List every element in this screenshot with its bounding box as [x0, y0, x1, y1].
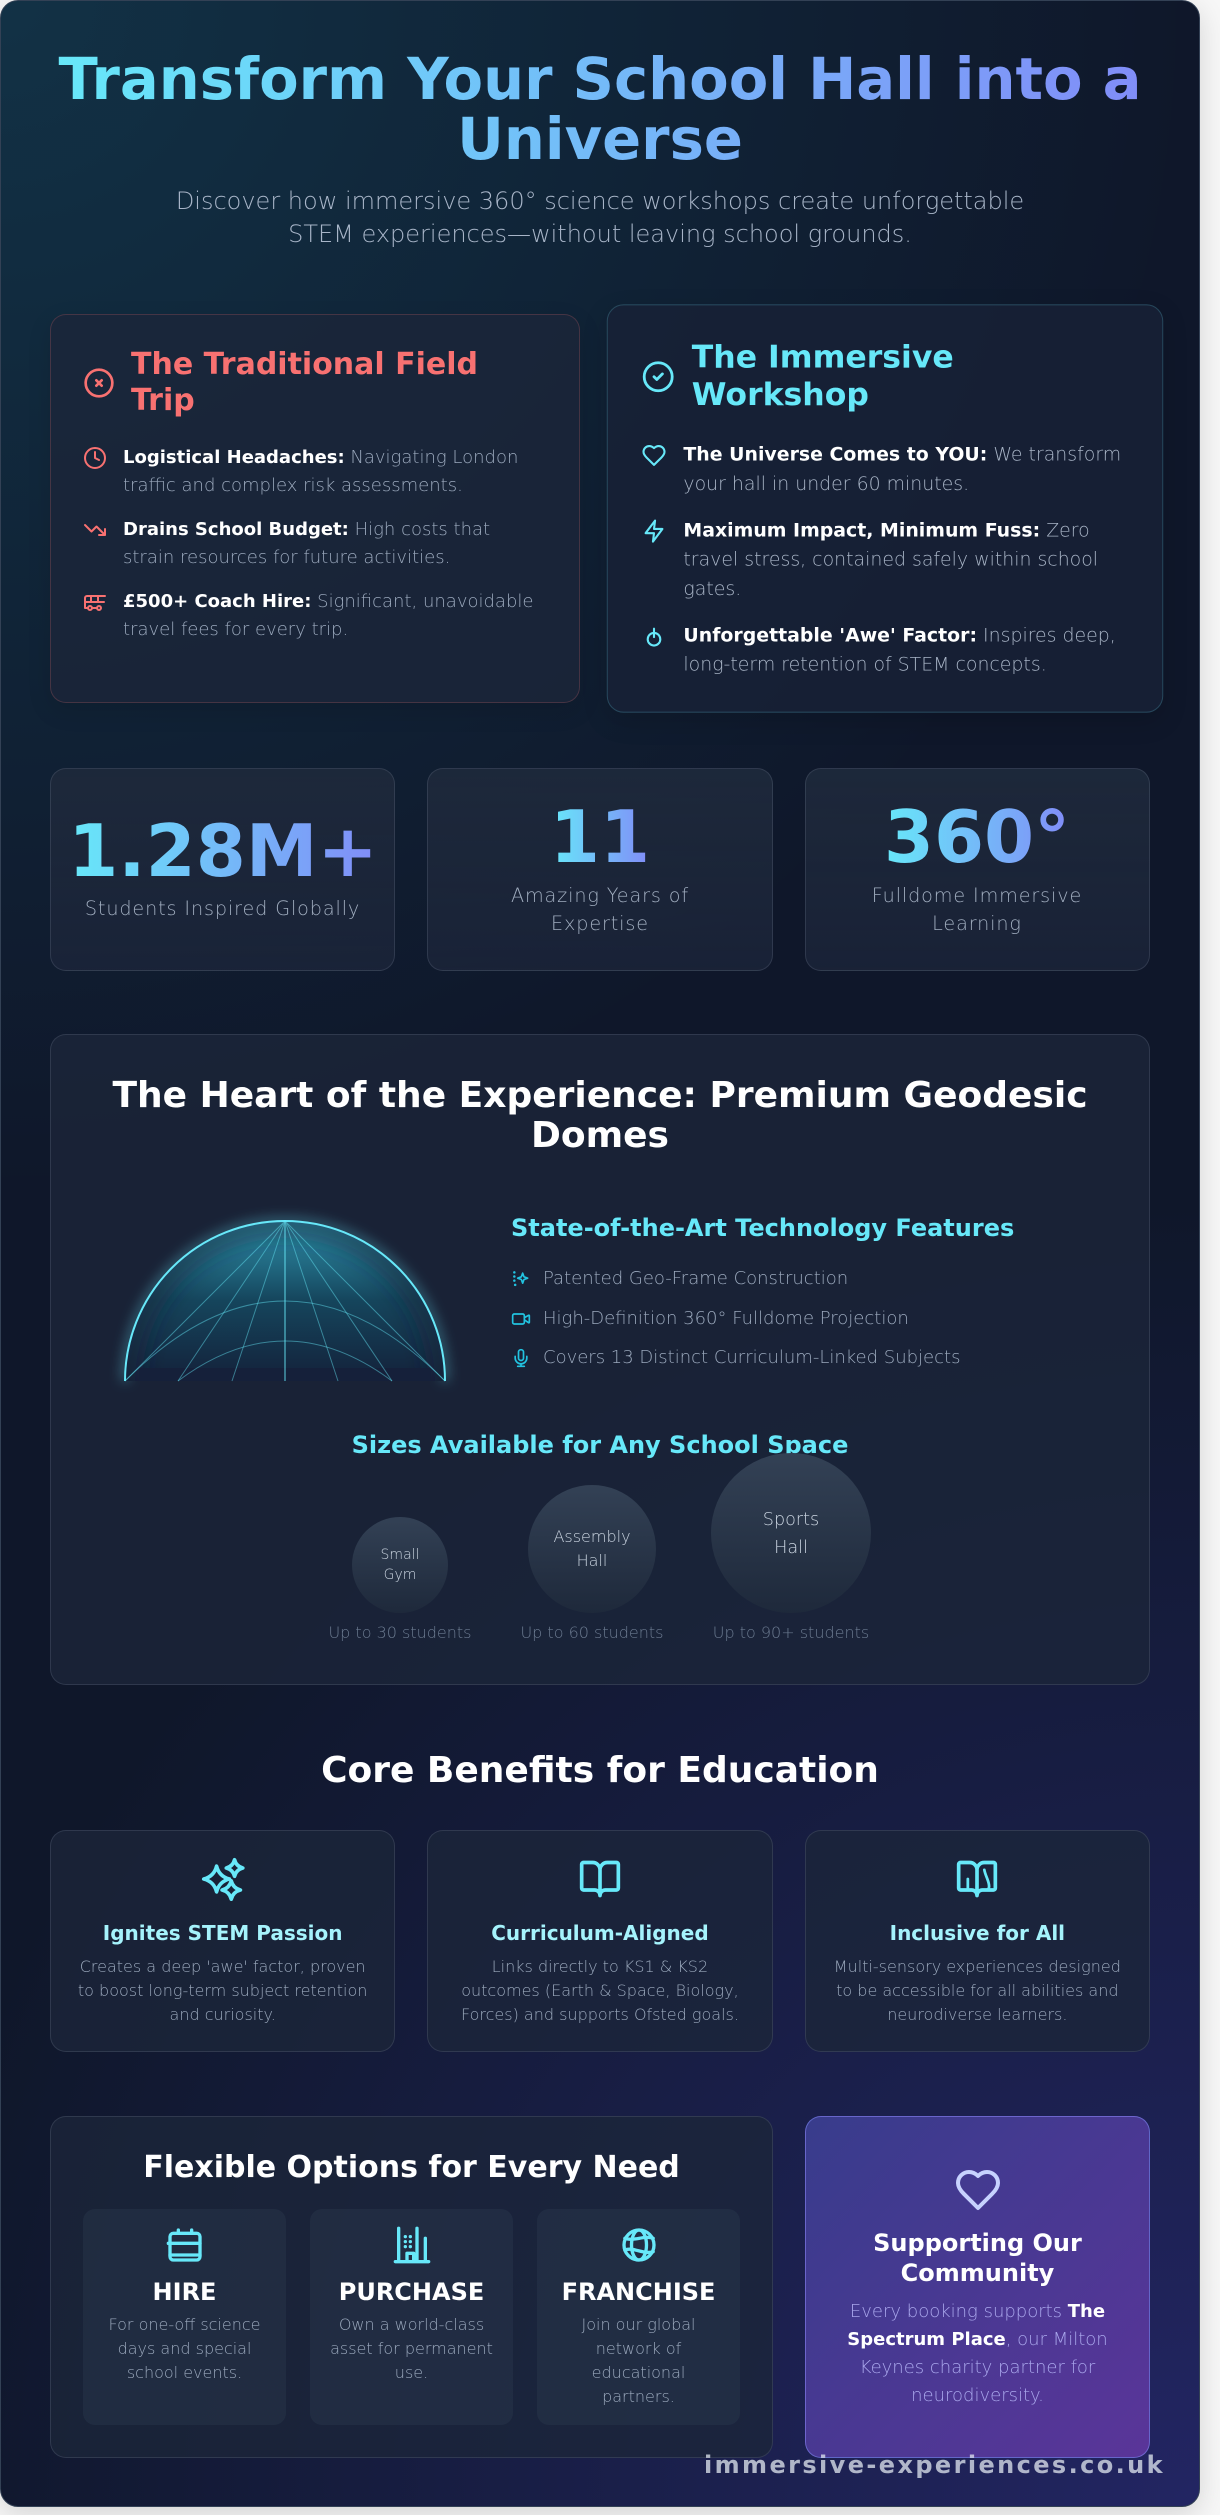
item: logistical headaches: Logistical Headaches: Navigating London traffic and complex risk assessments.	[123, 446, 518, 496]
size: sports hall: Hall	[774, 1538, 808, 1558]
heading: traditional field trip: The Traditional Field	[131, 347, 478, 382]
feature: projection: High-Definition 360° Fulldome Projection	[543, 1308, 909, 1329]
description: Multi-sensory experiences designed to be accessible for all abilities and neurodiverse learners.	[834, 1956, 1121, 2024]
item: awe factor: Unforgettable 'Awe' Factor: Inspires deep, long-term retention of STEM concepts.	[683, 624, 1116, 676]
title: FRANCHISE	[562, 2278, 715, 2306]
stat label: students inspired: Students Inspired Globally	[85, 897, 360, 920]
icon: accessible book	[956, 1860, 998, 1898]
panel: geodesic domes	[50, 1034, 1150, 1685]
heading: immersive workshop: Workshop	[692, 377, 869, 413]
feature: subjects: Covers 13 Distinct Curriculum-Linked Subjects	[543, 1347, 960, 1368]
description: For one-off science days and special school events.	[108, 2314, 261, 2382]
dome illustration	[115, 1210, 455, 1386]
stat label: fulldome: Fulldome Immersive Learning	[872, 884, 1082, 934]
item: coach hire: £500+ Coach Hire: Significant, unavoidable travel fees for every trip.	[123, 591, 533, 640]
heading: core benefits: Core Benefits for Education	[321, 1750, 879, 1791]
benefit: inclusive	[805, 1830, 1150, 2052]
title: PURCHASE	[339, 2278, 484, 2306]
subtitle: Discover how immersive 360° science workshops create unforgettable	[176, 187, 1024, 215]
description: Creates a deep 'awe' factor, proven to boost long-term subject retention and curiosity.	[78, 1956, 367, 2024]
stat number: 1.28M+: 1.28M+	[68, 809, 378, 893]
icon: sparkles	[202, 1858, 245, 1901]
icon: book	[580, 1860, 620, 1898]
heading: immersive workshop	[642, 339, 954, 413]
heading: flexible options: Flexible Options for Every Need	[143, 2150, 680, 2185]
heading: technology features: State-of-the-Art Technology Features	[511, 1214, 1014, 1242]
description: Every booking supports The Spectrum Place, our Milton Keynes charity partner for neurodiversity.	[847, 2301, 1108, 2406]
heading: sizes available: Sizes Available for Any School Space	[352, 1431, 848, 1459]
heading: traditional field trip: Trip	[131, 383, 195, 418]
footer url: immersive-experiences.co.uk	[704, 2451, 1165, 2479]
size: sports hall	[711, 1453, 871, 1613]
size: small gym	[352, 1517, 448, 1613]
stat number: 11: 11	[550, 795, 650, 879]
panel: flexible options	[50, 2116, 773, 2458]
icon: globe	[622, 2228, 656, 2262]
size: assembly hall: Assembly	[553, 1527, 631, 1546]
panel: community	[805, 2116, 1150, 2458]
option: purchase	[310, 2209, 513, 2425]
title: Universe	[457, 106, 743, 173]
description: Join our global network of educational partners.	[581, 2314, 696, 2406]
stat number: 360°: 360°	[884, 795, 1070, 879]
description: Links directly to KS1 & KS2 outcomes (Earth & Space, Biology, Forces) and supports Ofsted goals.	[461, 1956, 739, 2024]
title: Inclusive for All	[890, 1921, 1065, 1945]
size: small gym: Small	[381, 1547, 419, 1563]
size: assembly hall	[528, 1485, 656, 1613]
title: Transform Your School Hall into a	[59, 46, 1141, 113]
item: drains school budget: Drains School Budget: High costs that strain resources for future activities.	[123, 519, 490, 568]
title: Curriculum-Aligned	[491, 1921, 709, 1945]
subtitle: STEM experiences—without leaving school grounds.	[288, 220, 912, 248]
heading: heart of the experience: The Heart of the Experience: Premium Geodesic Domes	[112, 1075, 1088, 1156]
benefit: curriculum aligned	[427, 1830, 773, 2052]
size: assembly hall: Hall	[577, 1551, 607, 1570]
icon: heart	[956, 2170, 1000, 2210]
item: universe comes to you: The Universe Comes to YOU: We transform your hall in under 60 minutes.	[683, 443, 1121, 495]
stat label: years: Amazing Years of Expertise	[511, 884, 689, 934]
option: franchise	[537, 2209, 740, 2425]
feature: geo-frame: Patented Geo-Frame Construction	[543, 1268, 848, 1289]
benefit: stem passion	[50, 1830, 395, 2052]
subtitle	[176, 187, 1024, 248]
heading: traditional field trip	[84, 347, 478, 418]
icon: calendar	[166, 2228, 202, 2262]
title: Supporting Our Community	[873, 2229, 1082, 2287]
size: sports hall: Sports	[763, 1510, 819, 1530]
size: small gym: Gym	[384, 1567, 416, 1583]
title: HIRE	[153, 2278, 216, 2306]
icon: building	[394, 2226, 430, 2264]
option: hire	[83, 2209, 286, 2425]
description: Own a world-class asset for permanent use.	[330, 2314, 493, 2382]
caption: sports hall: Up to 90+ students	[713, 1623, 869, 1642]
panel: immersive workshop	[607, 304, 1163, 713]
title	[50, 50, 1150, 170]
item: maximum impact: Maximum Impact, Minimum Fuss: Zero travel stress, contained safely within school gates.	[683, 519, 1098, 600]
panel: traditional field trip	[50, 314, 580, 703]
panel: stat years of expertise	[427, 768, 773, 971]
heading: immersive workshop: The Immersive	[692, 339, 954, 376]
panel: stat fulldome	[805, 768, 1150, 971]
title: Ignites STEM Passion	[103, 1921, 342, 1945]
caption: assembly hall: Up to 60 students	[520, 1623, 664, 1642]
panel: stat students inspired	[50, 768, 395, 971]
caption: small gym: Up to 30 students	[328, 1623, 472, 1642]
